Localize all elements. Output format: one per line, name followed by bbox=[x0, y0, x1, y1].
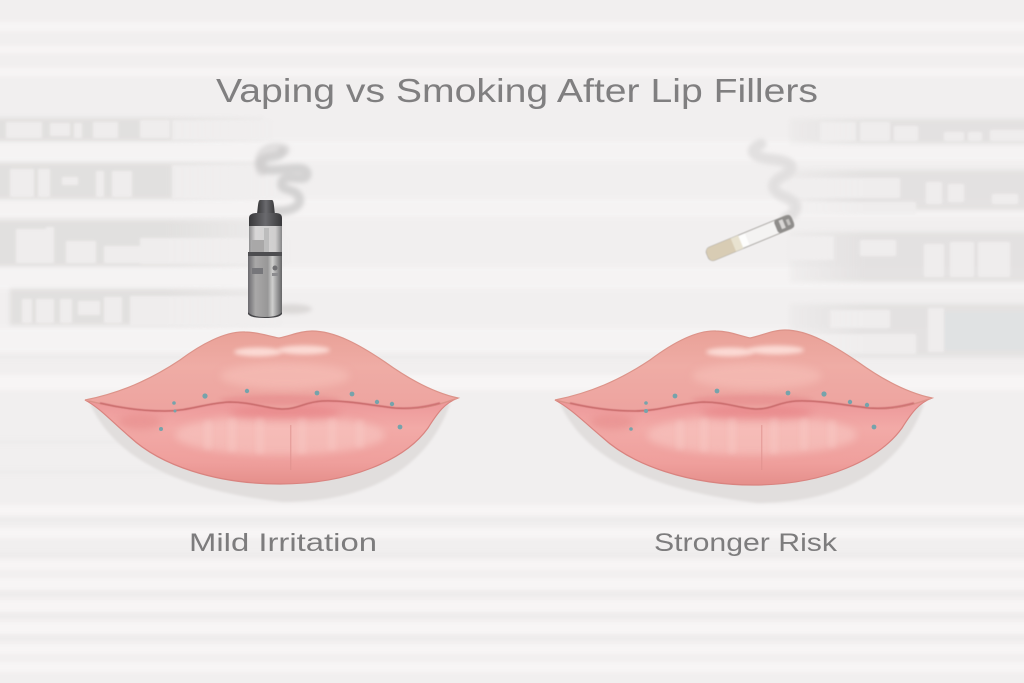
vape cap bbox=[249, 213, 282, 226]
vape shadow bbox=[272, 304, 312, 314]
lip shadow bbox=[560, 404, 924, 503]
mouth line bbox=[570, 401, 914, 411]
label: mild irritation: Mild Irritation bbox=[189, 529, 377, 557]
filler injection dots bbox=[629, 389, 876, 431]
vape tank bbox=[249, 226, 282, 253]
vape smoke bbox=[260, 149, 307, 211]
icon: cigarette bbox=[705, 144, 796, 262]
lips: left bbox=[85, 331, 458, 502]
upper lip highlights bbox=[220, 346, 350, 405]
lower lip bbox=[555, 398, 932, 485]
background: blurred pharmacy shelves with horizontal banding bbox=[0, 118, 1024, 357]
lips: right bbox=[555, 330, 932, 503]
label: stronger risk: Stronger Risk bbox=[654, 529, 838, 557]
upper lip bbox=[85, 331, 458, 411]
cigarette body bbox=[705, 214, 795, 262]
lower lip shading bbox=[118, 406, 385, 470]
icon: vape device bbox=[248, 149, 312, 318]
filler injection dots bbox=[159, 389, 402, 431]
lower lip bbox=[85, 398, 458, 484]
infographic canvas bbox=[0, 78, 1024, 556]
lower lip shading bbox=[590, 406, 857, 470]
mouth line bbox=[100, 401, 440, 411]
vape metal body bbox=[248, 252, 282, 318]
title: Vaping vs Smoking After Lip Fillers bbox=[216, 72, 818, 109]
upper lip highlights bbox=[692, 346, 822, 405]
upper lip bbox=[555, 330, 932, 411]
cigarette smoke bbox=[753, 144, 796, 218]
vape mouthpiece bbox=[257, 200, 275, 214]
lip shadow bbox=[90, 404, 450, 502]
